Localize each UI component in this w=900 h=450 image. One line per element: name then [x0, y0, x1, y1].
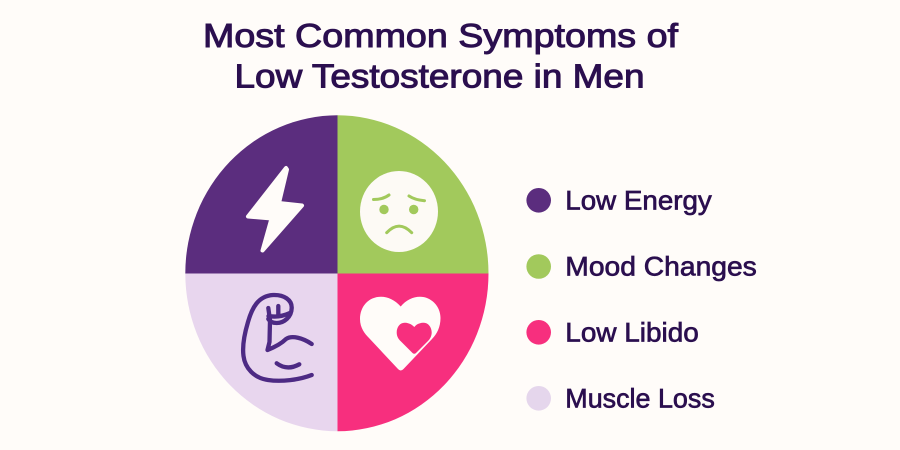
legend item: low energy: Low Energy [565, 185, 712, 215]
title [203, 18, 679, 95]
segment: mood changes [338, 115, 488, 274]
icon: flexed arm [243, 295, 312, 381]
title: Most Common Symptoms of [203, 18, 679, 55]
legend item: low libido: Low Libido [565, 318, 699, 348]
pie chart [185, 115, 489, 431]
segment: low energy [185, 115, 338, 274]
icon: sad face [360, 171, 438, 252]
title: Low Testosterone in Men [234, 58, 644, 95]
legend [526, 185, 757, 413]
legend item: muscle loss: Muscle Loss [565, 383, 715, 413]
segment: low libido [338, 274, 488, 431]
legend item: mood changes: Mood Changes [565, 252, 757, 282]
icon: lightning bolt [248, 168, 302, 250]
icon: heart [360, 297, 440, 370]
segment: muscle loss [185, 274, 338, 431]
